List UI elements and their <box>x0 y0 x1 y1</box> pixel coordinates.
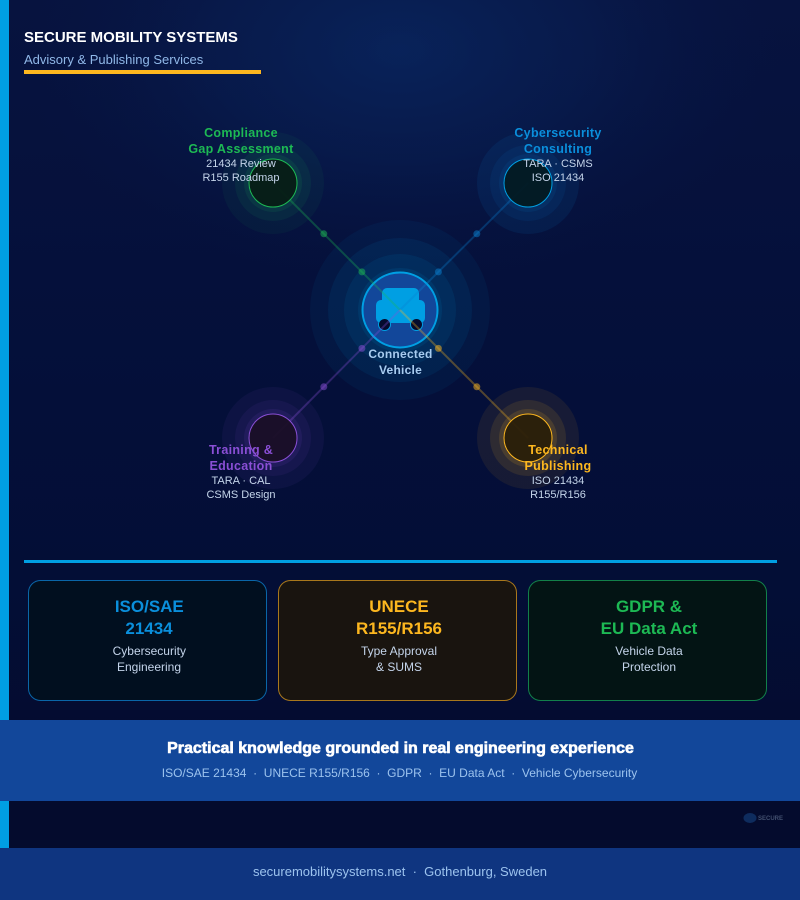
node: training and education: CSMS Design <box>206 489 276 501</box>
node: compliance gap assessment: R155 Roadmap <box>202 172 280 184</box>
logo mark: SECURE <box>758 816 783 822</box>
node: compliance gap assessment: 21434 Review <box>206 158 276 170</box>
panel: UNECE R155/R156: & SUMS <box>376 660 422 674</box>
logo mark <box>744 813 783 823</box>
panel: ISO/SAE 21434: 21434 <box>125 619 173 638</box>
panel: GDPR and EU Data Act: GDPR & <box>616 597 682 616</box>
footer text: securemobilitysystems.net · Gothenburg, Sweden <box>253 864 547 879</box>
node: cybersecurity consulting: TARA · CSMS <box>523 158 593 170</box>
top glow <box>9 0 800 290</box>
panel: ISO/SAE 21434: Cybersecurity <box>113 644 186 658</box>
node: technical publishing: Technical <box>528 443 588 457</box>
node: cybersecurity consulting: Consulting <box>524 142 592 156</box>
tagline: Practical knowledge grounded in real engineering experience <box>167 740 634 757</box>
panel: GDPR and EU Data Act <box>528 580 766 700</box>
connector: cybersecurity <box>400 183 528 310</box>
panel: UNECE R155/R156: R155/R156 <box>356 619 442 638</box>
centre label: Connected <box>368 347 433 361</box>
node: compliance gap assessment: Compliance <box>204 126 278 140</box>
subtitle: Advisory & Publishing Services <box>24 52 204 67</box>
connector: compliance <box>273 183 400 310</box>
node: technical publishing <box>477 387 591 501</box>
node: cybersecurity consulting: Cybersecurity <box>514 126 602 140</box>
connector: publishing <box>400 310 528 438</box>
node: training and education: TARA · CAL <box>211 475 271 487</box>
title: SECURE MOBILITY SYSTEMS <box>24 29 238 46</box>
section divider <box>24 560 777 563</box>
tagline band <box>0 720 800 801</box>
icon: car <box>376 288 425 330</box>
node: training and education: Training & <box>209 443 273 457</box>
left accent bar <box>0 0 9 848</box>
standards list: ISO/SAE 21434 · UNECE R155/R156 · GDPR · EU Data Act · Vehicle Cybersecurity <box>162 766 637 780</box>
panel: GDPR and EU Data Act: EU Data Act <box>601 619 698 638</box>
footer band <box>0 848 800 900</box>
node: cybersecurity consulting <box>477 126 602 234</box>
hub diagram <box>188 126 602 501</box>
node: compliance gap assessment: Gap Assessment <box>188 142 294 156</box>
panel: ISO/SAE 21434: Engineering <box>117 660 181 674</box>
node: training and education <box>206 387 324 501</box>
node: technical publishing: R155/R156 <box>530 489 586 501</box>
node: technical publishing: ISO 21434 <box>532 475 584 487</box>
node: training and education: Education <box>209 459 273 473</box>
panel: ISO/SAE 21434: ISO/SAE <box>115 597 184 616</box>
panel: UNECE R155/R156: Type Approval <box>361 644 437 658</box>
panel: GDPR and EU Data Act: Vehicle Data <box>615 644 683 658</box>
connector: training <box>273 310 400 438</box>
centre label line 2: Vehicle <box>379 363 422 377</box>
node: technical publishing: Publishing <box>525 459 591 473</box>
panel: UNECE R155/R156: UNECE <box>369 597 429 616</box>
node: compliance gap assessment <box>188 126 324 234</box>
panel: UNECE R155/R156 <box>278 580 516 700</box>
header <box>24 29 261 74</box>
centre node: connected vehicle <box>310 220 490 400</box>
panel: GDPR and EU Data Act: Protection <box>622 660 676 674</box>
panel: ISO/SAE 21434 <box>28 580 266 700</box>
node: cybersecurity consulting: ISO 21434 <box>532 172 584 184</box>
header underline <box>24 70 261 74</box>
